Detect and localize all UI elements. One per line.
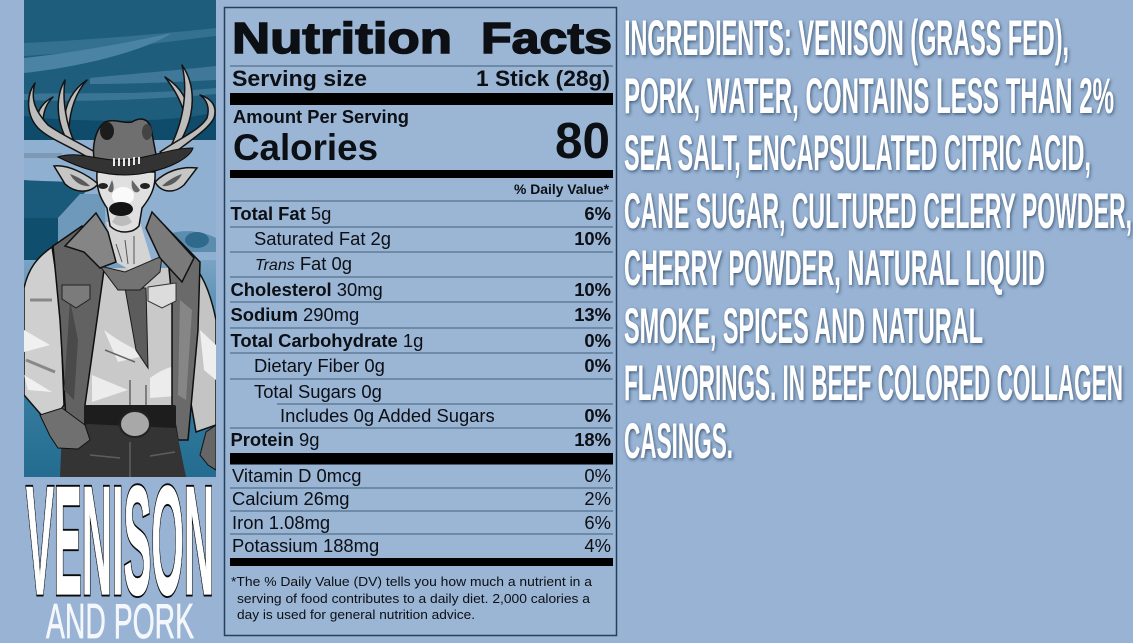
panel: nutrition facts label bbox=[224, 8, 616, 636]
vitamins and minerals rows: 0% bbox=[584, 465, 611, 486]
daily value header: % Daily Value* bbox=[514, 182, 610, 197]
calories block bbox=[233, 106, 610, 169]
vitamins and minerals rows: 2% bbox=[584, 488, 611, 509]
nutrient rows: Total Sugars 0g bbox=[254, 381, 382, 402]
neck fur and bandana bbox=[65, 212, 194, 368]
footnote: *The % Daily Value (DV) tells you how much a nutrient in a bbox=[231, 574, 593, 589]
vitamins and minerals rows: 4% bbox=[584, 535, 611, 556]
text: VENISON bbox=[26, 454, 214, 627]
vitamins and minerals rows: 6% bbox=[584, 512, 611, 533]
serving size row: 1 Stick (28g) bbox=[476, 66, 610, 91]
nutrient rows: 6% bbox=[584, 203, 611, 224]
calories block: Amount Per Serving bbox=[233, 106, 409, 127]
nutrient rows: Protein 9g bbox=[230, 429, 319, 450]
ingredients text block bbox=[624, 10, 1132, 469]
heading: Nutrition Facts: Facts bbox=[481, 14, 612, 63]
vitamins and minerals rows: Iron 1.08mg bbox=[232, 512, 330, 533]
calories block: 80 bbox=[555, 112, 610, 169]
vitamins and minerals rows bbox=[232, 465, 611, 556]
nutrient rows: 0% bbox=[584, 405, 611, 426]
serving size row bbox=[232, 66, 610, 91]
footnote bbox=[231, 574, 593, 622]
footnote: day is used for general nutrition advice. bbox=[237, 607, 475, 622]
serving size row: Serving size bbox=[232, 66, 367, 91]
shirt, vest and trousers bbox=[24, 226, 216, 477]
product name: VENISON bbox=[26, 454, 214, 627]
antlers bbox=[29, 65, 215, 162]
nutrient rows: Trans Fat 0g bbox=[255, 253, 352, 274]
nutrient rows: Saturated Fat 2g bbox=[254, 228, 391, 249]
right hand bbox=[200, 425, 216, 470]
footnote: serving of food contributes to a daily diet. 2,000 calories a bbox=[237, 591, 591, 606]
left fist bbox=[40, 408, 90, 449]
nutrient rows: 13% bbox=[574, 304, 611, 325]
nutrient rows: Sodium 290mg bbox=[230, 304, 359, 325]
deer ears bbox=[54, 166, 197, 191]
deer head bbox=[97, 172, 155, 232]
nutrient rows: Total Fat 5g bbox=[230, 203, 331, 224]
vitamins and minerals rows: Vitamin D 0mcg bbox=[232, 465, 361, 486]
illustration background scenery bbox=[24, 0, 216, 477]
vitamins and minerals rows: Potassium 188mg bbox=[232, 535, 379, 556]
heading: Nutrition Facts bbox=[232, 14, 612, 63]
text: VENISON bbox=[26, 454, 214, 627]
nutrient rows: Includes 0g Added Sugars bbox=[280, 405, 495, 426]
cowboy hat bbox=[58, 119, 193, 175]
nutrient rows: Total Carbohydrate 1g bbox=[230, 330, 423, 351]
panel: deer cowboy illustration bbox=[24, 0, 216, 477]
nutrient rows: 10% bbox=[574, 279, 611, 300]
nutrient rows: 18% bbox=[574, 429, 611, 450]
belt buckle bbox=[120, 411, 150, 437]
calories block: Calories bbox=[233, 127, 378, 168]
nutrient rows bbox=[230, 203, 611, 450]
nutrient rows: Cholesterol 30mg bbox=[230, 279, 383, 300]
ingredients text block: CASINGS. bbox=[624, 413, 733, 469]
heading: Nutrition Facts: Nutrition bbox=[232, 14, 452, 63]
nutrient rows: 10% bbox=[574, 228, 611, 249]
nutrient rows: 0% bbox=[584, 330, 611, 351]
vitamins and minerals rows: Calcium 26mg bbox=[232, 488, 350, 509]
nutrient rows: 0% bbox=[584, 355, 611, 376]
nutrient rows: Dietary Fiber 0g bbox=[254, 355, 385, 376]
